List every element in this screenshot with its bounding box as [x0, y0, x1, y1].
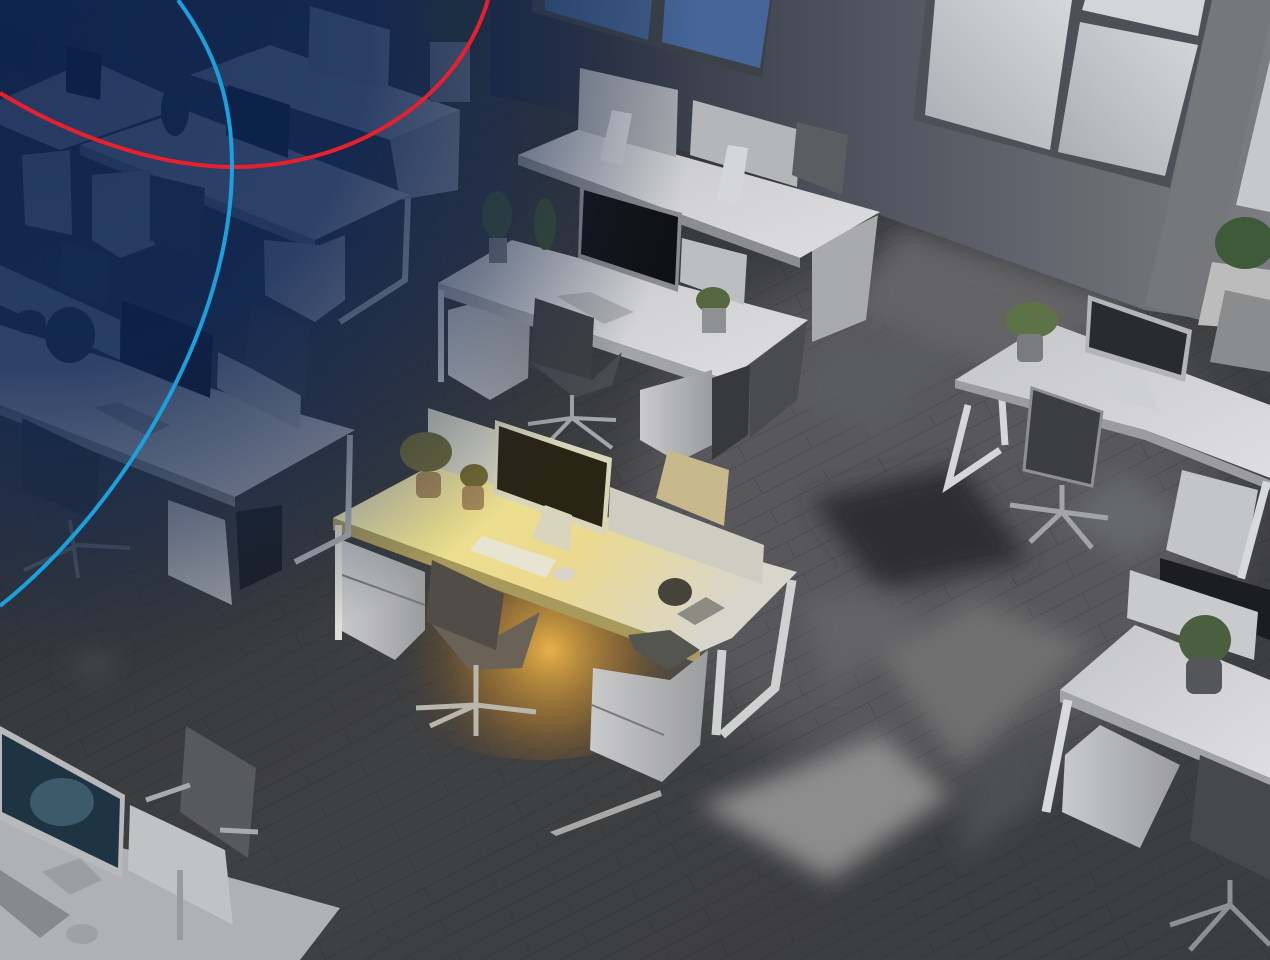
monitor stand [42, 858, 102, 895]
pedestal [168, 500, 232, 605]
red arc [0, 0, 488, 167]
desk: top left [0, 0, 478, 322]
pedestal right [590, 650, 708, 782]
chair [150, 175, 205, 258]
monitor [120, 300, 213, 398]
desk: lower right [1046, 558, 1270, 950]
desk top lit [333, 466, 797, 652]
desk: bottom left [0, 726, 340, 960]
partition [217, 352, 301, 430]
keyboard [94, 402, 170, 436]
warm glow on floor [380, 560, 700, 760]
white chair right [1166, 470, 1258, 578]
planter with greenery [1198, 217, 1270, 330]
plant [1006, 302, 1058, 362]
blue arc [0, 0, 232, 606]
far window [1236, 60, 1270, 212]
monitor back right [690, 100, 800, 205]
plants [482, 191, 730, 333]
partition back [428, 408, 496, 490]
mouse [553, 567, 575, 581]
monitors [0, 20, 290, 158]
plant [14, 307, 95, 363]
keyboard [556, 292, 634, 324]
monitor [1085, 295, 1192, 412]
partition right [608, 487, 764, 584]
keyboard [470, 536, 556, 578]
plant [1179, 615, 1231, 694]
chair [146, 726, 258, 858]
pedestal [1062, 725, 1180, 848]
chair [528, 298, 622, 448]
monitor back left [578, 68, 678, 165]
chair back right [792, 122, 848, 195]
mouse [66, 924, 98, 944]
chair [1010, 388, 1108, 548]
desk: back centre [518, 68, 880, 342]
back wall [490, 0, 1270, 330]
sunlight patches on floor [60, 230, 1190, 880]
desk: lit centre [333, 408, 797, 782]
light streak on floor [550, 790, 662, 836]
desk: left middle [0, 240, 355, 605]
monitor small [680, 238, 747, 305]
desk legs [716, 580, 792, 735]
keyboard [0, 870, 70, 938]
back chair [656, 450, 729, 526]
plant [161, 0, 478, 136]
partition [128, 805, 233, 925]
wall column [1145, 0, 1270, 320]
chair [416, 560, 540, 736]
pedestals [22, 150, 345, 322]
chairs [22, 240, 310, 578]
monitor with screen [0, 726, 125, 878]
window: large right [913, 0, 1212, 188]
rock and books [628, 578, 725, 670]
plants [400, 432, 488, 510]
desk: right [948, 290, 1270, 579]
pedestal left [340, 540, 425, 660]
monitor black [578, 185, 682, 292]
desk: middle centre [438, 185, 808, 462]
monitor [493, 420, 612, 552]
window: back left [532, 0, 772, 78]
chair [1170, 755, 1270, 950]
chair back [1210, 290, 1270, 372]
